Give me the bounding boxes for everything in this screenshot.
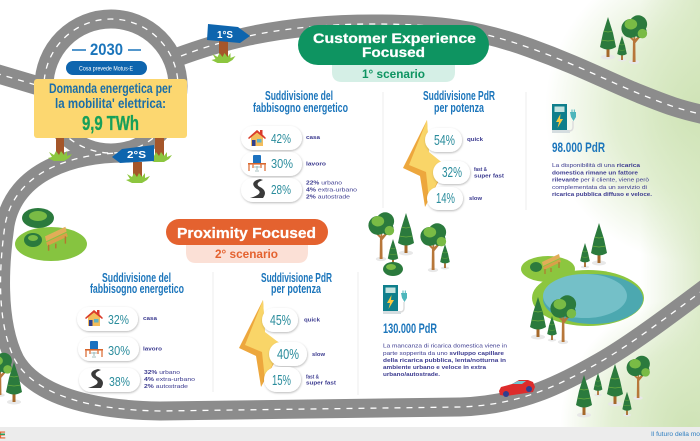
panel: 130.000 PdR (383, 285, 507, 378)
panel: scenario 2 energy breakdown: fabbisogno energetico (90, 282, 184, 296)
trees: top right (600, 15, 647, 64)
panel: scenario 1 energy breakdown: 30% (271, 156, 293, 171)
panel: scenario 1 charging points by power: quick (467, 137, 484, 143)
main signboard: 2030: 9,9 TWh (82, 113, 139, 135)
panel: scenario 2 energy breakdown: Suddivisione del (102, 271, 171, 285)
panel: 130.000 PdR: urbano/autostrade. (383, 372, 440, 378)
park: left with bench (15, 208, 87, 261)
panel: scenario 1 energy breakdown: 42% (271, 131, 291, 146)
panel: 98.000 PdR: rilevante per il cliente, viene però (552, 178, 649, 184)
subtitle: 1° scenario: 1° scenario (362, 69, 425, 81)
subtitle: 2° scenario (186, 245, 308, 263)
panel: scenario 2 charging points by power: 15% (272, 372, 291, 389)
title: Proximity Focused: Proximity Focused (177, 226, 316, 242)
panel: scenario 2 charging points by power: Suddivisione PdR (261, 271, 332, 285)
sign: 1°S (207, 24, 250, 63)
subtitle: 2° scenario: 2° scenario (215, 249, 278, 261)
panel: scenario 1 energy breakdown (241, 89, 357, 202)
trees: centre (368, 212, 450, 276)
sign: 2°S (112, 145, 154, 183)
main signboard: 2030 (34, 40, 187, 162)
panel: 130.000 PdR: 130.000 PdR (383, 320, 437, 336)
sign: 2°S: 2°S (127, 150, 146, 161)
panel: 130.000 PdR: ambiente urbano e veloce in extra (383, 365, 487, 371)
panel: scenario 1 energy breakdown: casa (306, 135, 321, 141)
panel: 98.000 PdR: domestica rimane un fattore (552, 170, 638, 176)
title: Customer Experience Focused: Focused (362, 44, 425, 60)
panel: 130.000 PdR: parte sopperita da uno sviluppo capillare (383, 351, 504, 357)
panel: scenario 2 energy breakdown: 4% extra-urbano (144, 377, 195, 383)
main signboard: 2030: Cosa prevede Motus-E (79, 66, 134, 72)
panel: scenario 1 energy breakdown: lavoro (306, 162, 327, 168)
panel: scenario 2 energy breakdown: 32% urbano (144, 370, 180, 376)
panel: scenario 1 charging points by power: fast & (474, 167, 487, 173)
panel: scenario 2 energy breakdown: 32% (108, 312, 129, 327)
main signboard: 2030: 2030 (90, 40, 123, 59)
panel: scenario 2 charging points by power: quick (304, 318, 321, 324)
panel: scenario 2 charging points by power: 40% (277, 346, 299, 363)
background: green gradient on right (540, 0, 700, 427)
panel: scenario 2 charging points by power: 45% (270, 312, 291, 329)
panel: 98.000 PdR: La disponibilità di una ricarica (552, 163, 641, 169)
panel: scenario 1 charging points by power: per potenza (434, 101, 485, 115)
panel: scenario 2 charging points by power: fast & (306, 374, 319, 380)
footer bar: Il futuro della mo (651, 431, 700, 438)
panel: scenario 1 charging points by power: 54% (434, 132, 455, 149)
panel: 98.000 PdR: 98.000 PdR (552, 139, 605, 155)
panel: scenario 1 charging points by power: super fast (474, 174, 504, 180)
panel: scenario 2 energy breakdown: 30% (108, 343, 130, 358)
panel: 98.000 PdR: ricarica pubblica diffuso e veloce. (552, 192, 652, 198)
trees: bottom left (0, 353, 22, 404)
panel: scenario 1 energy breakdown: 22% urbano (306, 180, 342, 186)
panel: scenario 2 charging points by power: per potenza (271, 282, 322, 296)
panel: scenario 2 charging points by power: slow (312, 352, 326, 358)
panel: scenario 1 energy breakdown: 2% autostrade (306, 194, 350, 200)
panel: 130.000 PdR: La mancanza di ricarica domestica viene in (383, 344, 507, 350)
title: Customer Experience Focused: Customer Experience (313, 30, 476, 46)
panel: scenario 1 charging points by power: slow (469, 196, 483, 202)
panel: scenario 2 energy breakdown (77, 271, 195, 392)
footer bar (0, 427, 700, 441)
panel: scenario 1 charging points by power: Suddivisione PdR (423, 89, 495, 103)
park: lake and bench (521, 223, 644, 344)
panel: scenario 1 energy breakdown: Suddivisione del (265, 89, 333, 103)
panel: scenario 2 energy breakdown: lavoro (143, 346, 163, 352)
panel: scenario 2 energy breakdown: 2% autostrade (144, 384, 188, 390)
car (499, 380, 535, 397)
panel: scenario 2 charging points by power (239, 271, 336, 392)
subtitle: 1° scenario (332, 65, 455, 82)
panel: 98.000 PdR (552, 104, 652, 198)
panel: 130.000 PdR: della ricarica pubblica, lenta/notturna in (383, 358, 507, 364)
panel: scenario 2 energy breakdown: casa (143, 316, 158, 322)
panel: scenario 1 charging points by power: 14% (436, 190, 455, 207)
panel: scenario 1 energy breakdown: 28% (271, 182, 291, 197)
trees: bottom right (576, 356, 650, 418)
panel: scenario 1 energy breakdown: fabbisogno energetico (253, 101, 348, 115)
main signboard: 2030: Domanda energetica per (49, 80, 172, 96)
panel: 98.000 PdR: complementata da un servizio di (552, 185, 647, 191)
title: Proximity Focused (166, 219, 328, 245)
sign: 1°S: 1°S (217, 30, 233, 41)
panel: scenario 1 energy breakdown: 4% extra-urbano (306, 188, 357, 194)
panel: scenario 2 charging points by power: super fast (306, 380, 336, 386)
panel: scenario 1 charging points by power (403, 89, 504, 210)
title: Customer Experience Focused (298, 25, 489, 65)
panel: scenario 2 energy breakdown: 38% (109, 374, 130, 389)
main signboard: 2030: la mobilita' elettrica: (55, 95, 166, 111)
panel: scenario 1 charging points by power: 32% (442, 164, 462, 181)
